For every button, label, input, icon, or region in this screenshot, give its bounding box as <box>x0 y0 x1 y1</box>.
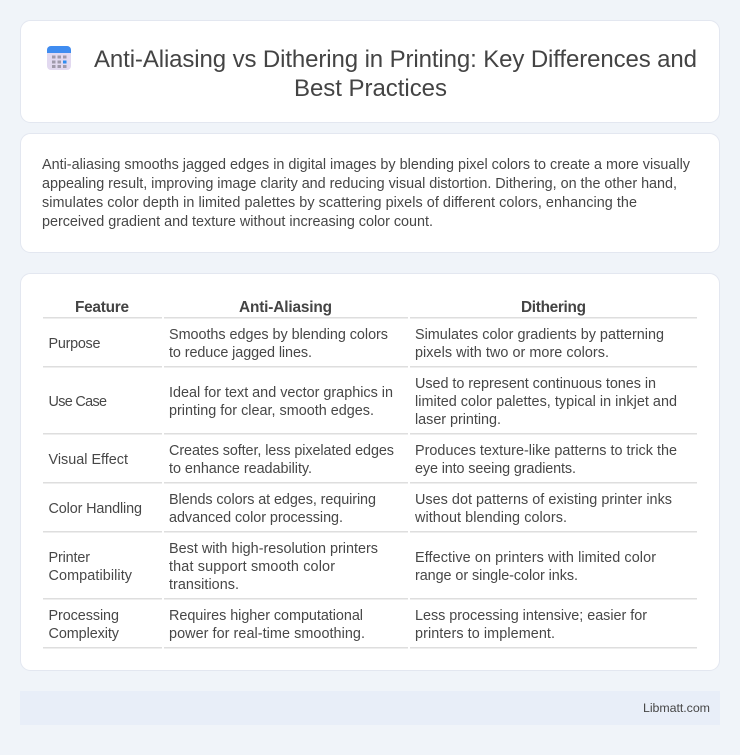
row: visual effect: eye into seeing gradients. <box>415 461 576 477</box>
row: use case <box>48 376 677 428</box>
footer: Libmatt.com <box>643 701 710 715</box>
panel: comparison table <box>20 274 720 670</box>
row: color handling: advanced color processing. <box>169 510 343 526</box>
title <box>94 46 697 102</box>
intro text: perceived gradient and texture without increasing color count. <box>42 214 433 230</box>
panel: title card <box>20 20 720 122</box>
row: printer compatibility: Printer <box>48 550 90 566</box>
row: use case: Used to represent continuous tones in <box>415 376 656 392</box>
row: visual effect: Produces texture-like patterns to trick the <box>415 443 677 459</box>
row: purpose: Purpose <box>48 336 100 352</box>
table header: Feature <box>75 299 129 316</box>
row: visual effect <box>48 443 677 477</box>
row: purpose <box>48 327 664 361</box>
row: processing complexity: Processing <box>48 608 119 624</box>
row: color handling: without blending colors. <box>414 510 567 526</box>
row: color handling: Uses dot patterns of existing printer inks <box>415 492 672 508</box>
row: use case: printing for clear, smooth edges. <box>169 403 374 419</box>
intro text: Anti-aliasing smooths jagged edges in digital images by blending pixel colors to create a more visually <box>42 157 691 173</box>
footer <box>20 691 720 725</box>
table header <box>75 299 586 316</box>
row: color handling <box>48 492 672 526</box>
row: printer compatibility: transitions. <box>169 577 239 593</box>
row: printer compatibility: range or single-color inks. <box>415 568 578 584</box>
row: printer compatibility: that support smooth color <box>169 559 335 575</box>
table header: Anti-Aliasing <box>239 299 332 316</box>
row: processing complexity: printers to implement. <box>415 626 555 642</box>
row: processing complexity <box>48 608 647 642</box>
row: purpose: pixels with two or more colors. <box>415 345 609 361</box>
row: color handling: Blends colors at edges, requiring <box>169 492 376 508</box>
row: use case: limited color palettes, typical in inkjet and <box>415 394 677 410</box>
row: processing complexity: power for real-time smoothing. <box>169 626 365 642</box>
row: purpose: Simulates color gradients by patterning <box>415 327 664 343</box>
intro text: appealing result, improving image clarity and reducing visual distortion. Dithering, on the other hand, <box>42 176 677 192</box>
row: printer compatibility: Effective on printers with limited color <box>415 550 656 566</box>
intro text <box>42 157 691 230</box>
icon: calendar <box>47 46 71 70</box>
row: printer compatibility: Compatibility <box>48 568 133 584</box>
intro text: simulates color depth in limited palettes by scattering pixels of different colors, enhancing the <box>42 195 637 211</box>
row: use case: Ideal for text and vector graphics in <box>169 385 393 401</box>
row: printer compatibility: Best with high-resolution printers <box>169 541 378 557</box>
title: Anti-Aliasing vs Dithering in Printing: Key Differences and <box>94 46 697 73</box>
row: visual effect: Creates softer, less pixelated edges <box>169 443 394 459</box>
row: processing complexity: Complexity <box>48 626 120 642</box>
row: use case: Use Case <box>48 394 107 410</box>
row: processing complexity: Requires higher computational <box>169 608 363 624</box>
row: visual effect: to enhance readability. <box>169 461 312 477</box>
row: purpose: to reduce jagged lines. <box>169 345 312 361</box>
row: use case: laser printing. <box>415 412 501 428</box>
row: processing complexity: Less processing intensive; easier for <box>415 608 647 624</box>
row: purpose: Smooths edges by blending colors <box>169 327 388 343</box>
row: printer compatibility <box>48 541 656 593</box>
row: color handling: Color Handling <box>48 501 142 517</box>
title: Best Practices <box>294 75 447 102</box>
row: visual effect: Visual Effect <box>48 452 128 468</box>
table header: Dithering <box>521 299 586 316</box>
panel: introduction <box>20 134 720 252</box>
